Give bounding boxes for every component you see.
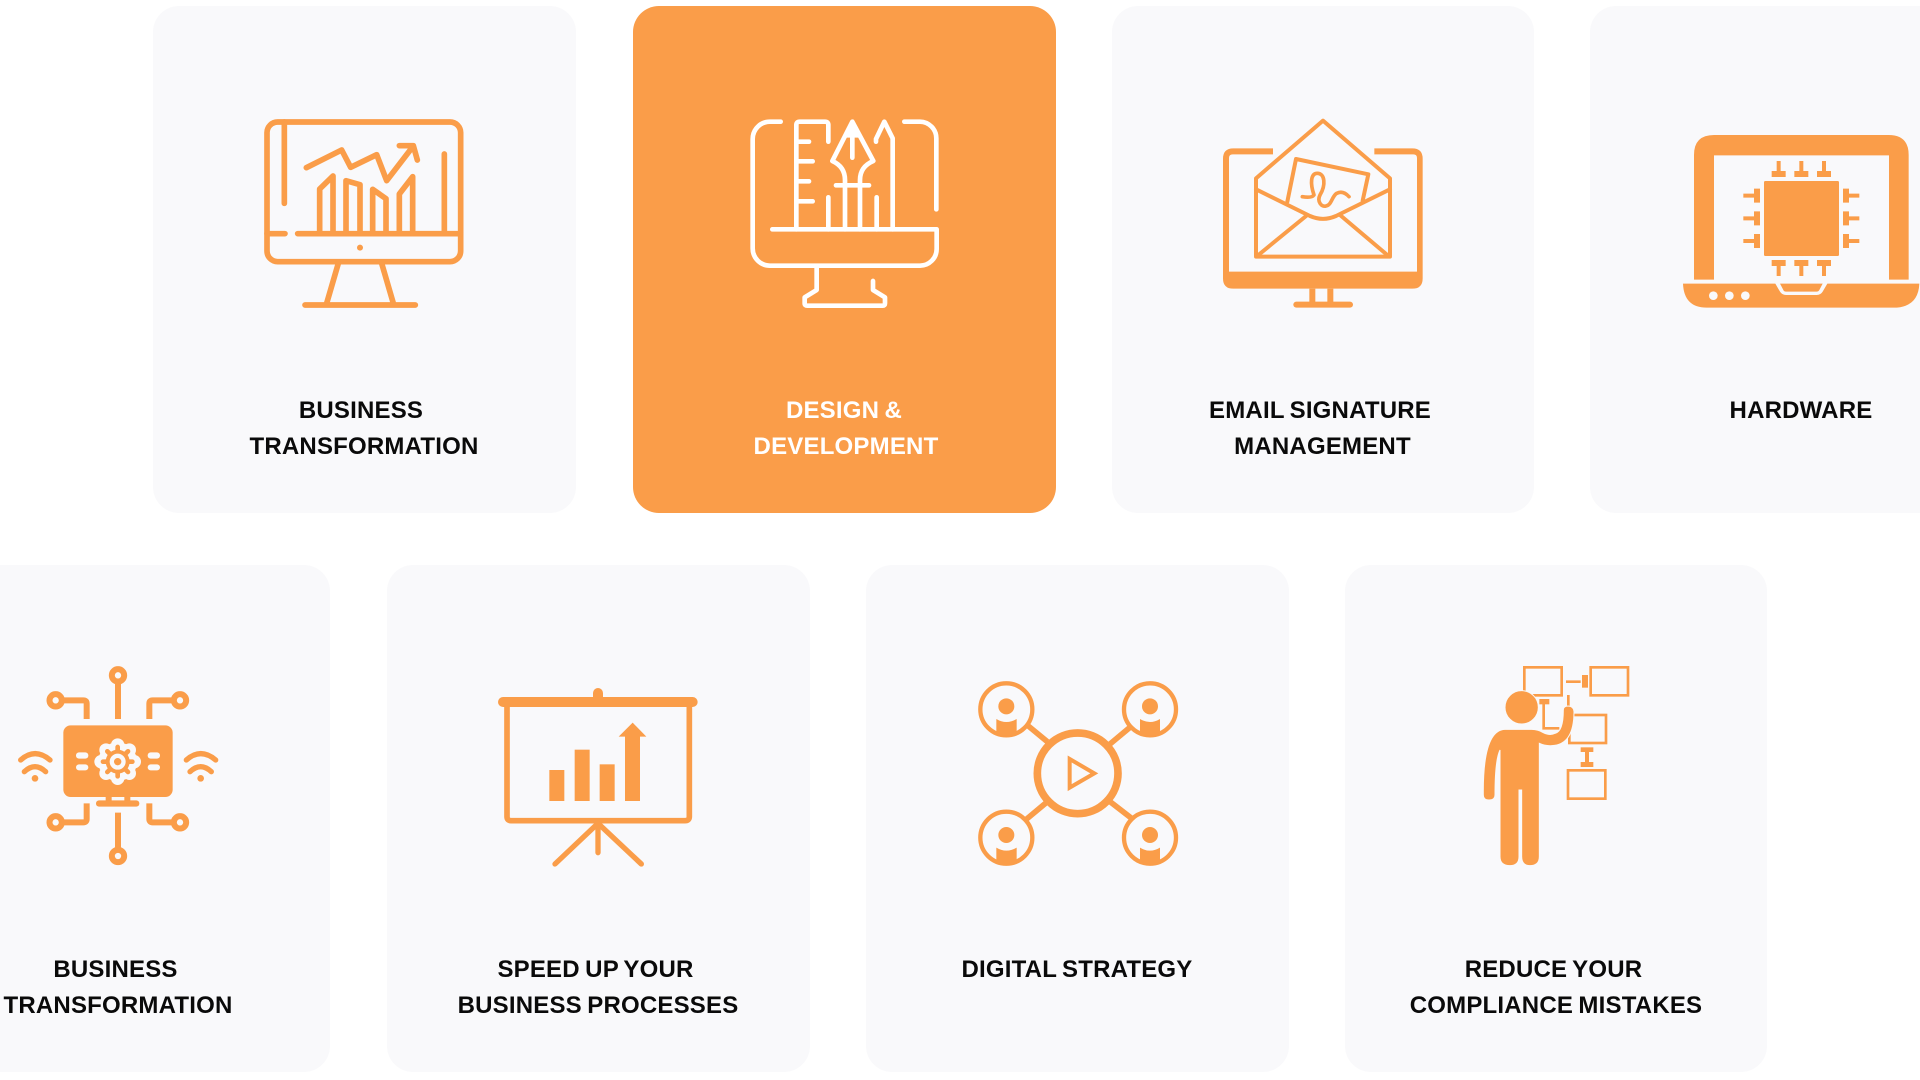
panel: reduce your compliance mistakes [1344, 565, 1767, 1072]
label [458, 956, 738, 1019]
icon: monitor with open envelope [1223, 118, 1423, 308]
label: COMPLIANCE MISTAKES [1410, 992, 1702, 1019]
panel: business transformation (bottom) [0, 565, 330, 1072]
label: MANAGEMENT [1234, 433, 1411, 460]
label [4, 956, 232, 1019]
icon: presentation board with growth chart [498, 688, 698, 867]
icon: person pointing at flow chart [1484, 666, 1630, 866]
label [754, 397, 938, 460]
icon: monitor with ruler, pen nib and pencil [750, 119, 939, 308]
panel: hardware [1590, 6, 1920, 513]
label: TRANSFORMATION [4, 992, 232, 1019]
label [250, 397, 478, 460]
label [1209, 397, 1431, 460]
label: HARDWARE [1730, 397, 1872, 424]
icon: monitor with rising chart [264, 119, 464, 308]
icon: laptop with chip [1683, 135, 1920, 308]
panel: design and development (highlighted) [633, 6, 1056, 513]
icon: video hub connected to people [978, 681, 1178, 866]
label [1410, 956, 1702, 1019]
label: BUSINESS [53, 956, 178, 983]
panel: business transformation (top) [153, 6, 576, 513]
label: TRANSFORMATION [250, 433, 478, 460]
label: REDUCE YOUR [1465, 956, 1642, 983]
label: DESIGN & [786, 397, 902, 424]
icon: connected screen with gear [18, 666, 218, 866]
label: BUSINESS PROCESSES [458, 992, 738, 1019]
panel: digital strategy [866, 565, 1288, 1072]
label: EMAIL SIGNATURE [1209, 397, 1431, 424]
label: SPEED UP YOUR [497, 956, 694, 983]
label: DIGITAL STRATEGY [961, 956, 1193, 983]
label: BUSINESS [299, 397, 423, 424]
label: DEVELOPMENT [754, 433, 938, 460]
panel: email signature management [1112, 6, 1534, 513]
panel: speed up your business processes [387, 565, 810, 1072]
